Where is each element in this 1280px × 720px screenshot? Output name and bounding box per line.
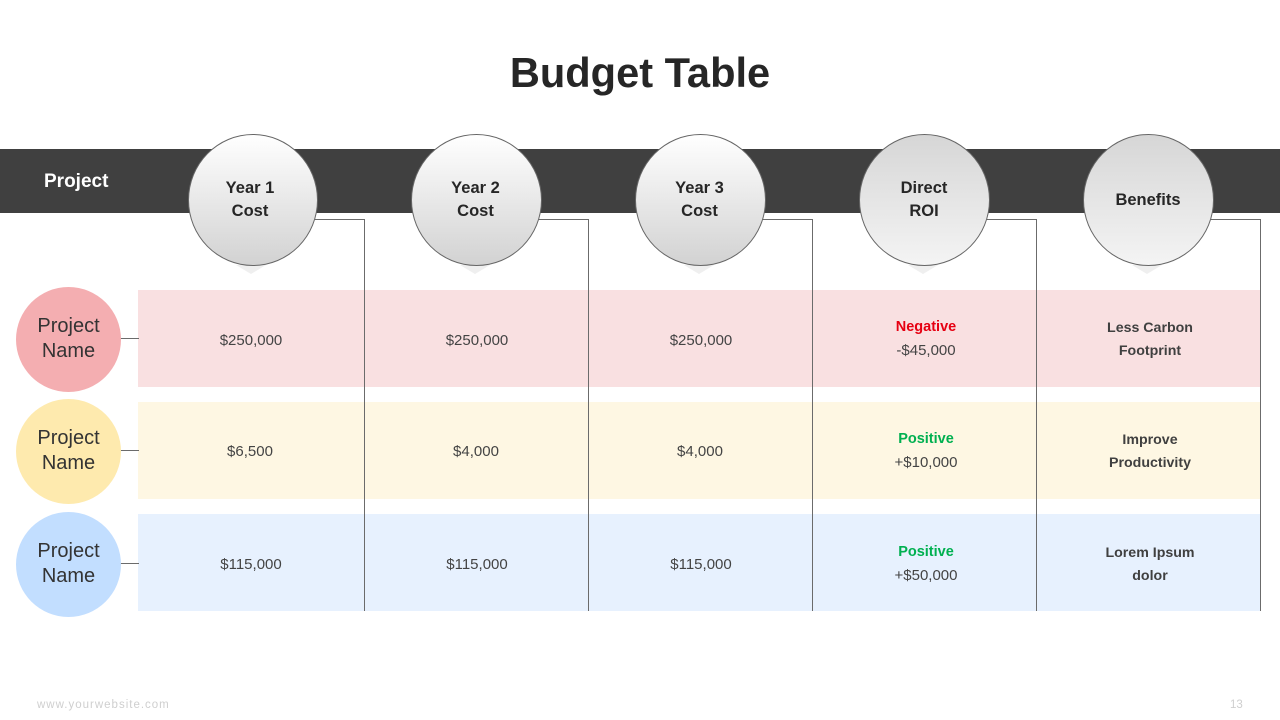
column connector: year 1 [300, 219, 365, 611]
column connector: benefits [1196, 219, 1261, 611]
row: yellow band [138, 402, 1260, 499]
pointer: year 3 [684, 265, 714, 274]
connector: row 1 [120, 338, 139, 339]
cell: row 2 benefits [1109, 432, 1191, 471]
column heading: direct ROI [859, 134, 990, 266]
cell: row 1 ROI: -$45,000 [896, 342, 956, 359]
project badge: red: Project [37, 314, 100, 336]
connector: row 2 [120, 450, 139, 451]
project badge: blue: Name [42, 564, 95, 586]
column connector: year 3 [748, 219, 813, 611]
project badge: blue [16, 512, 121, 617]
cell: row 1 ROI: Negative [896, 319, 956, 335]
cell: row 3 year 3: $115,000 [670, 556, 732, 573]
title: Budget Table [510, 49, 770, 96]
cell: row 3 benefits [1105, 545, 1195, 584]
project badge: yellow [16, 399, 121, 504]
column heading: benefits [1083, 134, 1214, 266]
column heading: year 2 cost [411, 134, 542, 266]
column heading: year 1 cost [188, 134, 318, 266]
pointer: benefits [1132, 265, 1162, 274]
column heading: year 2 cost: Cost [457, 202, 494, 220]
column heading: year 2 cost: Year 2 [451, 179, 500, 197]
project badge: blue: Project [37, 540, 100, 562]
project badge: yellow: Name [42, 452, 95, 474]
column heading: year 3 cost: Year 3 [675, 179, 724, 197]
cell: row 2 year 3: $4,000 [677, 443, 723, 460]
column heading: year 3 cost: Cost [681, 202, 718, 220]
project badge: red: Name [42, 340, 95, 362]
cell: row 2 benefits: Productivity [1109, 455, 1191, 471]
column connector: year 2 [524, 219, 589, 611]
cell: row 3 benefits: dolor [1132, 568, 1168, 584]
cell: row 1 ROI [896, 319, 956, 359]
column heading: benefits: Benefits [1115, 190, 1181, 208]
connector: row 3 [120, 563, 139, 564]
column heading: year 1 cost: Year 1 [226, 179, 274, 197]
cell: row 2 ROI: Positive [898, 431, 954, 447]
cell: row 2 year 2: $4,000 [453, 443, 499, 460]
column heading: direct ROI: Direct [901, 179, 947, 197]
project badge: yellow: Project [37, 426, 100, 448]
cell: row 3 year 2: $115,000 [446, 556, 508, 573]
column heading: year 3 cost [635, 134, 766, 266]
footer: website: www.yourwebsite.com [37, 699, 170, 711]
cell: row 2 year 1: $6,500 [227, 443, 273, 460]
cell: row 3 ROI [894, 544, 957, 584]
cell: row 1 benefits: Less Carbon [1107, 320, 1193, 336]
cell: row 3 ROI: Positive [898, 544, 954, 560]
cell: row 3 benefits: Lorem Ipsum [1105, 545, 1195, 561]
row: red band [138, 290, 1260, 387]
column heading: direct ROI: ROI [909, 202, 939, 220]
cell: row 1 benefits [1107, 320, 1193, 359]
cell: row 3 ROI: +$50,000 [894, 567, 957, 584]
pointer: direct ROI [908, 265, 938, 274]
cell: row 1 benefits: Footprint [1119, 343, 1181, 359]
cell: row 1 year 2: $250,000 [446, 332, 508, 349]
cell: row 2 benefits: Improve [1122, 432, 1178, 448]
column connector: direct ROI [972, 219, 1037, 611]
row: blue band [138, 514, 1260, 611]
pointer: year 2 [460, 265, 490, 274]
column heading: year 1 cost: Cost [232, 202, 268, 220]
pointer: year 1 [236, 265, 266, 274]
footer: page number: 13 [1230, 699, 1243, 711]
cell: row 2 ROI: +$10,000 [894, 454, 957, 471]
header bar [0, 149, 1280, 213]
cell: row 1 year 1: $250,000 [220, 332, 282, 349]
cell: row 1 year 3: $250,000 [670, 332, 732, 349]
cell: row 3 year 1: $115,000 [220, 556, 282, 573]
project badge: red [16, 287, 121, 392]
header label: project: Project [44, 171, 108, 192]
cell: row 2 ROI [894, 431, 957, 471]
